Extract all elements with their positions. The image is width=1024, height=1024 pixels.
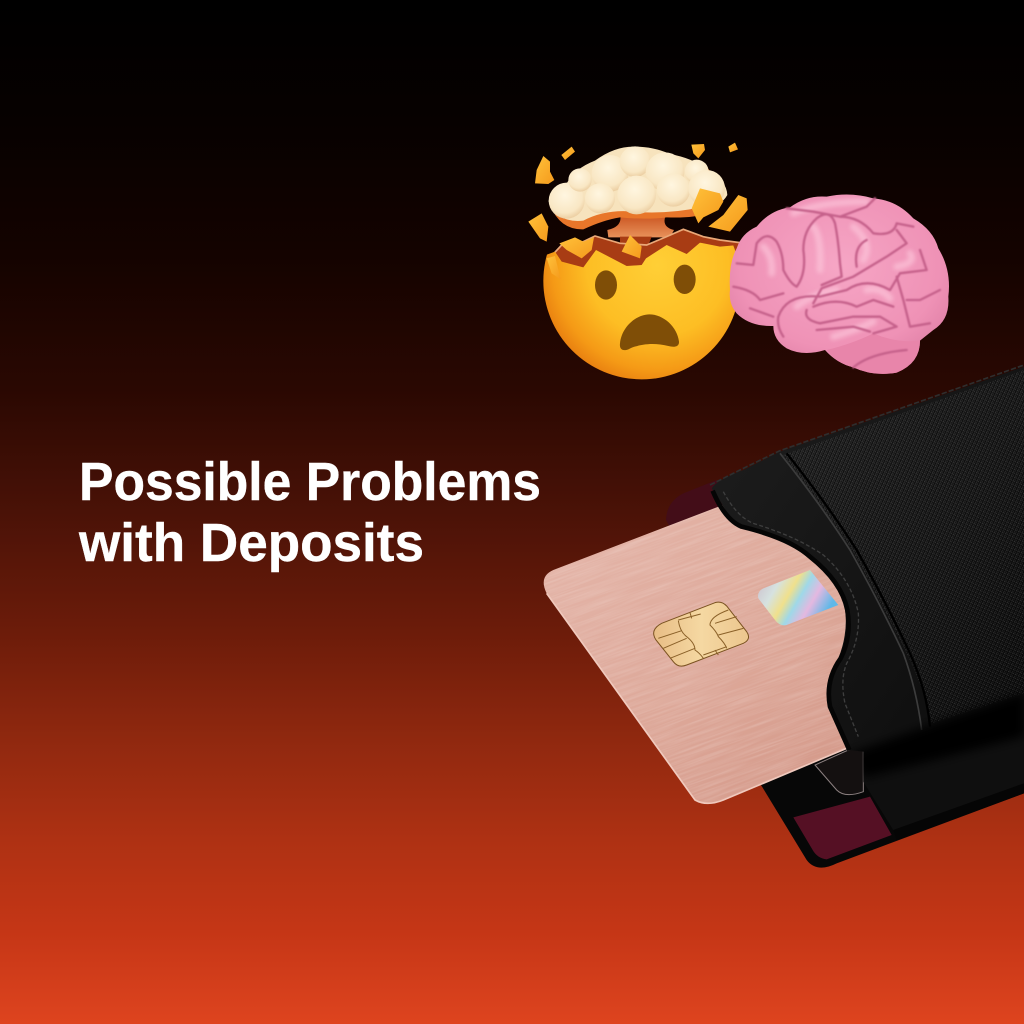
title — [78, 452, 541, 573]
lower shadow strip — [850, 693, 1024, 778]
brain highlights — [763, 202, 912, 337]
title: Possible Problems — [79, 452, 541, 512]
mushroom cloud — [549, 146, 727, 250]
chip — [654, 602, 749, 666]
wallet front pocket — [712, 367, 1024, 830]
cerebellum — [827, 333, 920, 374]
icon: pink brain — [730, 195, 949, 374]
head — [543, 242, 736, 380]
wallet back lower panel — [760, 693, 1024, 868]
lower wallet strap — [863, 730, 1024, 830]
shell shards — [528, 143, 748, 279]
maroon lining — [793, 797, 892, 859]
title: with Deposits — [78, 513, 424, 573]
pocket rim stitching — [713, 491, 859, 750]
eyes — [595, 265, 696, 300]
emoji: exploding head — [528, 143, 748, 379]
hologram — [758, 570, 838, 625]
brain folds — [733, 198, 940, 367]
seam — [710, 365, 1024, 730]
wallet with rose gold card — [544, 364, 1024, 868]
rose gold card — [544, 505, 846, 804]
second card behind — [815, 743, 863, 795]
mouth — [620, 314, 679, 350]
wallet back flap — [666, 480, 730, 533]
wallet bottom edge — [893, 783, 1024, 840]
head interior — [553, 229, 740, 290]
textured leather panel — [783, 370, 1024, 723]
